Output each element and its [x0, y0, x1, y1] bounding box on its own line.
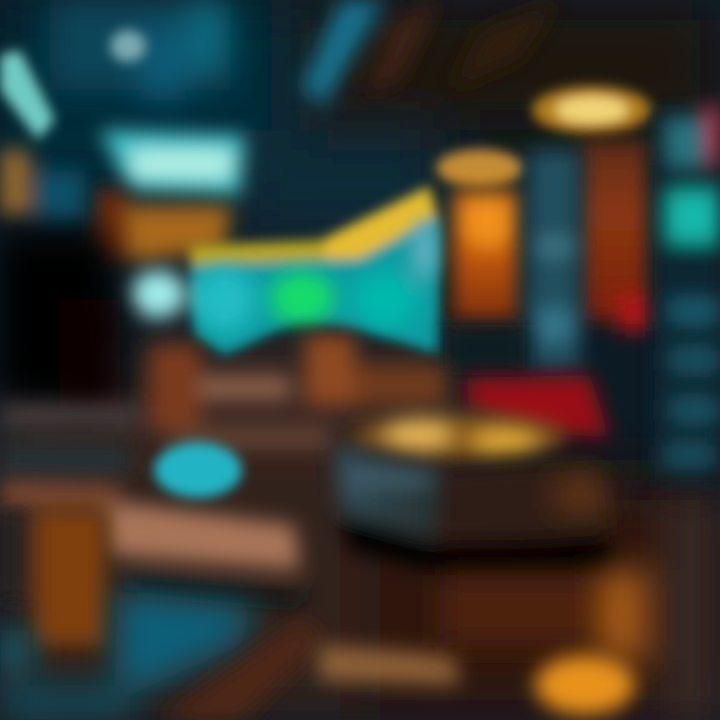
orange panel — [95, 190, 232, 262]
bottom left teal — [0, 590, 325, 720]
tan desk streaks — [0, 480, 310, 605]
chart: yellow band and teal bars — [130, 185, 440, 355]
top left teal streaks — [0, 0, 230, 140]
top center teal stripe — [300, 0, 560, 105]
orange right floor — [440, 480, 720, 720]
left edge lamp — [0, 150, 85, 220]
orange brown block — [0, 510, 105, 645]
gold table — [355, 415, 565, 459]
lower dark strip — [445, 325, 525, 375]
brown desk center — [0, 335, 445, 475]
left dark monitor — [0, 235, 120, 410]
right teal shelves — [655, 105, 720, 480]
orange column — [453, 190, 519, 325]
red brown column — [582, 140, 652, 331]
orange floor glow — [535, 655, 635, 715]
lamp right — [532, 86, 652, 134]
lamp middle — [436, 149, 524, 187]
red couch — [465, 375, 610, 438]
pale cyan screen — [100, 130, 245, 195]
teal glow spot — [154, 442, 242, 498]
dark table base — [335, 445, 610, 572]
blue grey column — [528, 150, 580, 370]
tan strip bottom center — [318, 645, 460, 685]
